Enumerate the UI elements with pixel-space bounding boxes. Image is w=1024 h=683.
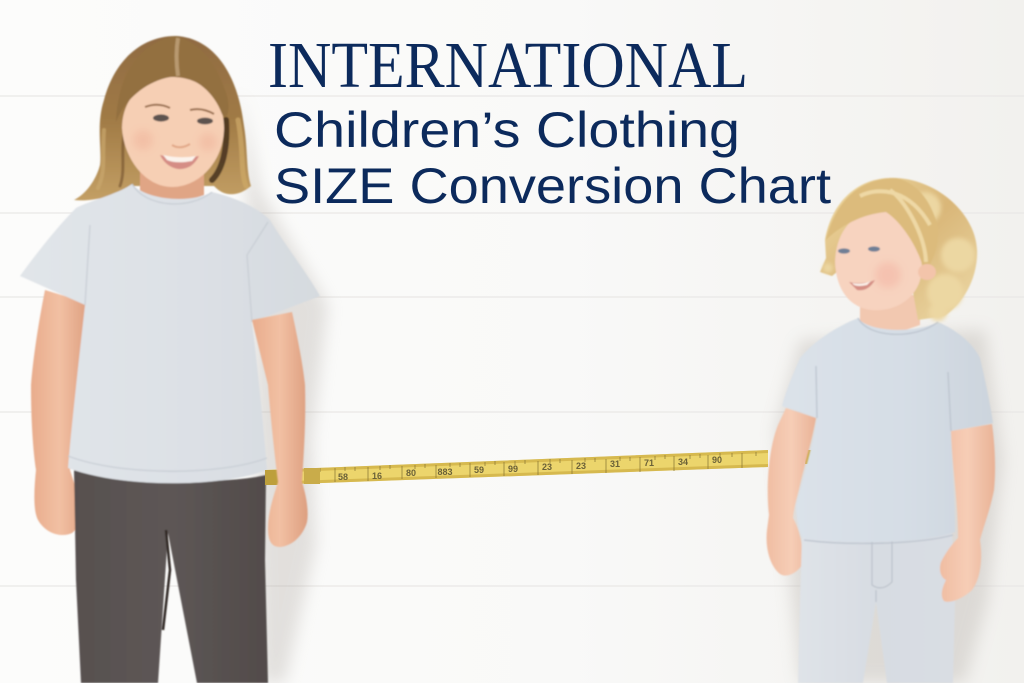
title line 2: Children’s Clothing	[274, 102, 740, 158]
tape numbers: 71	[644, 458, 654, 468]
boy: eyes	[838, 246, 880, 254]
girl: right arm and hand	[252, 312, 308, 547]
boy: neck	[860, 295, 920, 336]
girl: hair back	[74, 36, 251, 200]
boy: ear	[918, 264, 936, 280]
tape numbers	[338, 455, 722, 482]
boy: hair back	[820, 178, 977, 320]
boy: curls	[823, 192, 975, 321]
tape numbers: 23	[542, 462, 552, 472]
tape numbers: 58	[338, 472, 348, 482]
tape numbers: 31	[610, 459, 620, 469]
tape numbers: 99	[508, 464, 518, 474]
boy: fringe	[826, 178, 938, 272]
boy: cheek	[875, 262, 901, 288]
girl: nose	[172, 144, 190, 147]
boy: left arm	[767, 408, 816, 576]
girl: eyes and brows	[145, 105, 214, 124]
girl: hair strands	[98, 120, 246, 188]
tape numbers: 16	[372, 471, 382, 481]
tape numbers: 883	[437, 467, 453, 477]
tape numbers: 90	[712, 455, 722, 465]
tape numbers: 80	[406, 468, 416, 478]
boy: smile	[849, 280, 875, 290]
boy: pants	[798, 532, 955, 683]
girl: fringe	[116, 36, 228, 122]
tape numbers: 23	[576, 461, 586, 471]
measuring tape	[265, 450, 812, 485]
title line 3: SIZE Conversion Chart	[274, 158, 831, 214]
wall shadows behind children	[240, 90, 1003, 683]
girl: face	[122, 77, 224, 187]
boy: t-shirt	[782, 318, 993, 542]
tape numbers: 34	[678, 457, 688, 467]
title line 1: INTERNATIONAL	[268, 29, 748, 102]
boy: face	[835, 210, 922, 310]
girl: neck	[140, 165, 204, 206]
girl: left arm	[31, 290, 88, 535]
tape numbers: 59	[474, 465, 484, 475]
girl: t-shirt	[20, 184, 320, 483]
title	[268, 29, 831, 214]
girl: smile	[160, 155, 199, 169]
girl: pants	[74, 470, 268, 683]
girl figure	[20, 36, 320, 683]
girl: cheeks	[133, 130, 217, 151]
tape end tabs	[265, 470, 279, 485]
tape tick marks	[300, 453, 742, 483]
boy: right arm and hand	[940, 424, 995, 602]
boy figure	[767, 178, 995, 683]
